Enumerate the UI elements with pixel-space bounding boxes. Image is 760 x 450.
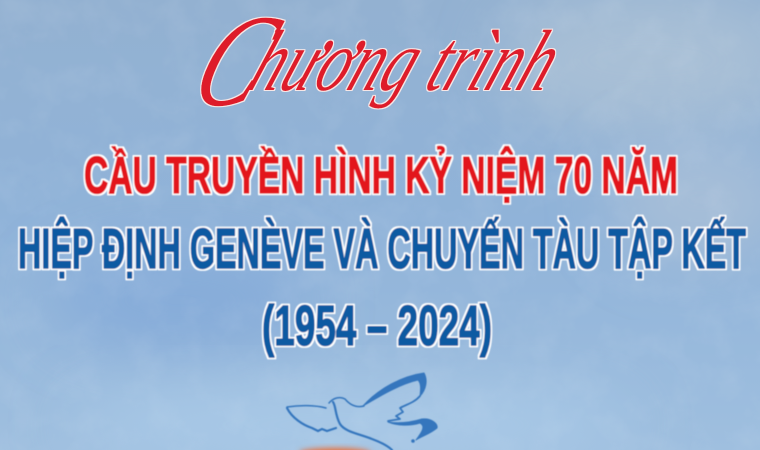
script heading: [175, 0, 585, 134]
heading line 3: years: (1954 – 2024): [262, 294, 492, 358]
orange sun glimpse: [299, 448, 371, 450]
script heading: hương trình: [237, 14, 575, 110]
icon: dove: [287, 373, 437, 450]
